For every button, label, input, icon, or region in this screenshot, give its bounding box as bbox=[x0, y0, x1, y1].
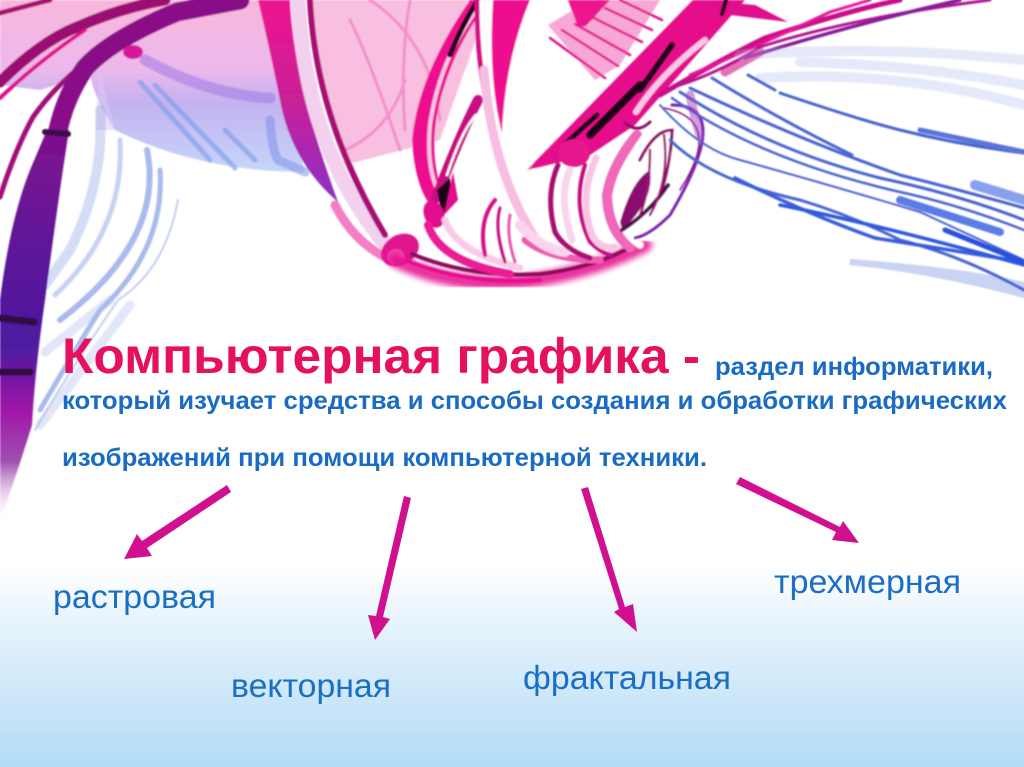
right thin pink tubes bbox=[660, 0, 900, 95]
ring on diagonal bbox=[558, 139, 590, 167]
lower left loops bbox=[428, 225, 510, 274]
definition text: раздел информатики, bbox=[715, 353, 993, 381]
curled tubes bbox=[551, 165, 590, 258]
definition text bbox=[62, 353, 1007, 472]
center blade tube bbox=[258, 0, 338, 202]
arrow to 3D bbox=[736, 477, 859, 543]
bottom swoop bbox=[395, 245, 645, 283]
center ring bbox=[375, 227, 425, 273]
label: 3D: трехмерная bbox=[774, 563, 961, 600]
left translucent fan bbox=[0, 0, 305, 172]
center pink fan bbox=[310, 0, 490, 165]
dark spiral bbox=[620, 125, 672, 232]
label: raster: растровая bbox=[53, 578, 216, 615]
arrow to fractal bbox=[581, 487, 637, 632]
center white tube bbox=[478, 0, 548, 235]
label: vector: векторная bbox=[231, 667, 391, 704]
title: Компьютерная графика - bbox=[62, 328, 700, 384]
right blue lines bbox=[740, 51, 1024, 105]
abstract tube artwork bbox=[0, 0, 1024, 520]
arrow to vector bbox=[368, 496, 411, 640]
definition text: изображений при помощи компьютерной техники. bbox=[62, 444, 707, 472]
purple main tube bbox=[0, 130, 69, 520]
left blue pale lines bbox=[35, 110, 178, 430]
label: fractal: фрактальная bbox=[523, 659, 731, 696]
right hatched fan bbox=[548, 0, 660, 80]
upper left thin pink tubes bbox=[0, 0, 50, 13]
arrow to raster bbox=[124, 485, 231, 559]
left magenta blade tube bbox=[412, 0, 490, 205]
definition text: который изучает средства и способы создания и обработки графических bbox=[62, 387, 1007, 415]
diagonal tubes bbox=[527, 0, 745, 170]
